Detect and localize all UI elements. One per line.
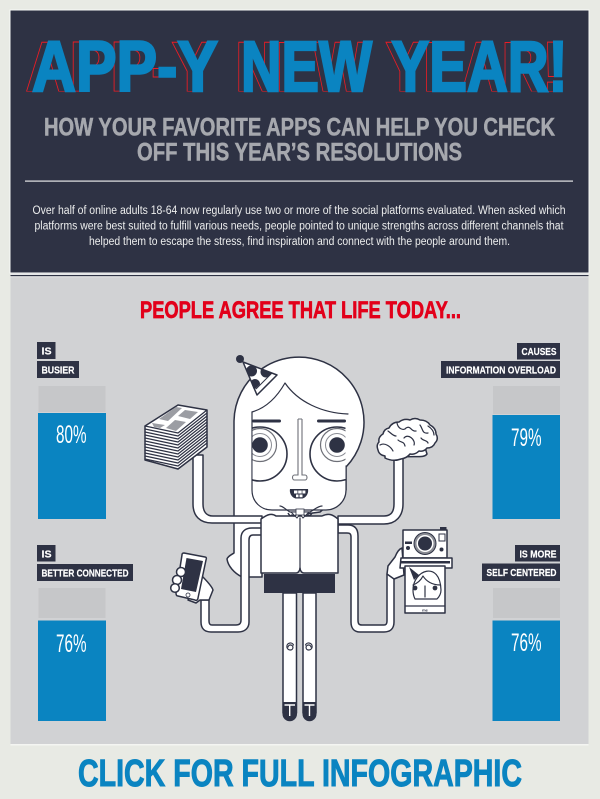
panel: header	[10, 10, 590, 274]
subtitle: OFF THIS YEAR’S RESOLUTIONS	[137, 138, 462, 166]
title: APP-Y	[32, 28, 218, 107]
icon: brain	[377, 418, 437, 460]
title: NEW	[235, 28, 366, 108]
stat: better connected: BETTER CONNECTED	[42, 568, 129, 580]
icon: camera and photo	[387, 527, 452, 613]
stat: information overload	[441, 343, 560, 519]
upper arm right	[338, 456, 403, 524]
hair	[227, 357, 364, 577]
photo: me	[422, 608, 429, 612]
stat: information overload: CAUSES	[522, 346, 556, 358]
stat: information overload: 79%	[511, 424, 542, 452]
stat: better connected: 76%	[56, 630, 86, 658]
panel: life today	[10, 273, 588, 746]
lower arm right	[338, 525, 394, 632]
illustration: character	[145, 355, 452, 721]
face	[252, 383, 348, 510]
mouth	[290, 489, 308, 498]
eyes	[252, 426, 346, 482]
intro text	[32, 205, 566, 248]
heading: PEOPLE AGREE THAT LIFE TODAY...	[140, 297, 461, 324]
intro text: helped them to escape the stress, find inspiration and connect with the people around them.	[89, 236, 510, 248]
subtitle	[44, 114, 555, 166]
shoes	[282, 702, 316, 721]
stat: busier: 80%	[56, 421, 86, 449]
title	[26, 40, 564, 92]
skirt	[264, 574, 335, 593]
stat: self centered: 76%	[511, 629, 542, 657]
stat: information overload: INFORMATION OVERLOAD	[446, 364, 556, 376]
stat: self centered: IS MORE	[520, 548, 556, 560]
stat: busier	[37, 342, 106, 519]
stat: busier: IS	[42, 346, 52, 358]
lower arm left	[201, 528, 262, 632]
eyebrows	[252, 420, 346, 422]
collar	[280, 506, 322, 518]
title: NEW	[241, 28, 372, 107]
icon: phone in hand	[171, 553, 213, 603]
stat: self centered: SELF CENTERED	[486, 567, 557, 579]
icon: newspapers	[145, 405, 207, 469]
nose	[292, 419, 307, 480]
upper arm left	[193, 455, 262, 523]
title: YEAR!	[385, 28, 561, 108]
stat: self centered	[482, 545, 560, 721]
torso	[261, 514, 338, 573]
stat: busier: BUSIER	[42, 364, 75, 376]
party hat	[236, 355, 277, 395]
title: APP-Y	[25, 28, 212, 108]
stat: better connected	[37, 545, 133, 721]
stat: better connected: IS	[42, 548, 52, 560]
legs	[283, 593, 316, 713]
